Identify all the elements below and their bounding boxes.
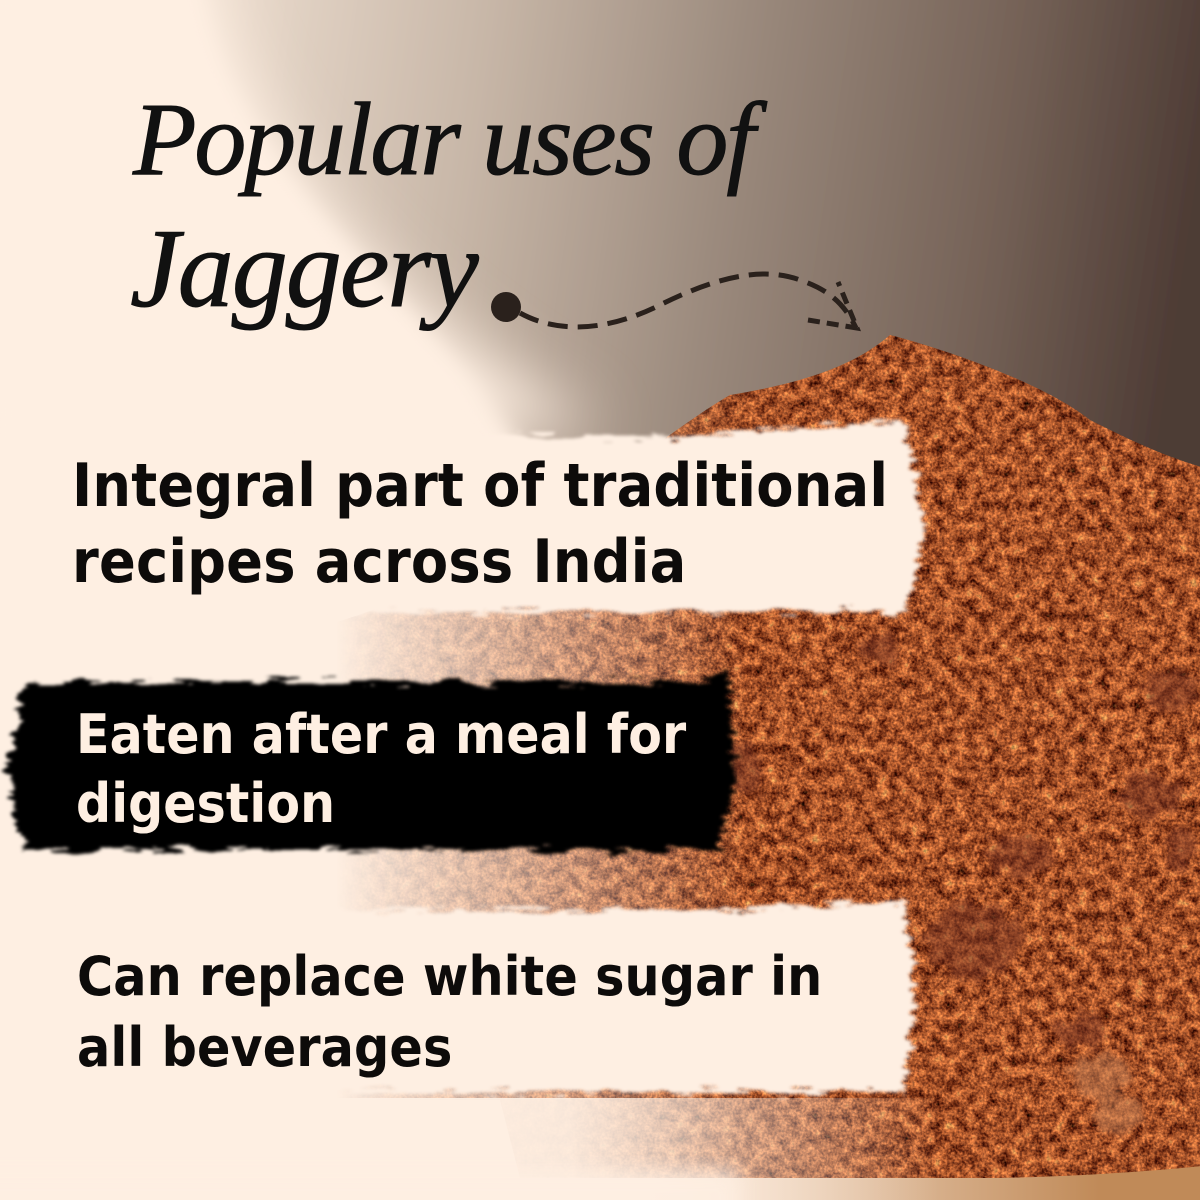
brush band 2 xyxy=(5,670,735,850)
arrow: dashed curve xyxy=(491,272,861,332)
top wall gradient xyxy=(190,0,1200,560)
text block 3: all beverages xyxy=(77,1016,452,1079)
text block 1: recipes across India xyxy=(72,527,686,597)
text block 2: Eaten after a meal for xyxy=(76,703,686,766)
title: Popular uses of xyxy=(133,82,753,197)
bottom fade xyxy=(300,1098,940,1200)
text block 1 xyxy=(72,451,888,597)
title: Jaggery xyxy=(130,207,477,331)
bottom spoon xyxy=(650,1158,1200,1200)
text block 3: Can replace white sugar in xyxy=(77,945,822,1008)
jaggery mound xyxy=(350,335,1200,1178)
text block 3 xyxy=(77,945,822,1079)
text block 2: digestion xyxy=(76,772,335,835)
text block 1: Integral part of traditional xyxy=(72,451,888,521)
brush band 1 xyxy=(0,420,925,612)
brush band 3 xyxy=(0,900,915,1092)
jaggery chunks xyxy=(727,635,1200,1135)
title xyxy=(130,82,768,331)
text block 2 xyxy=(76,703,686,835)
